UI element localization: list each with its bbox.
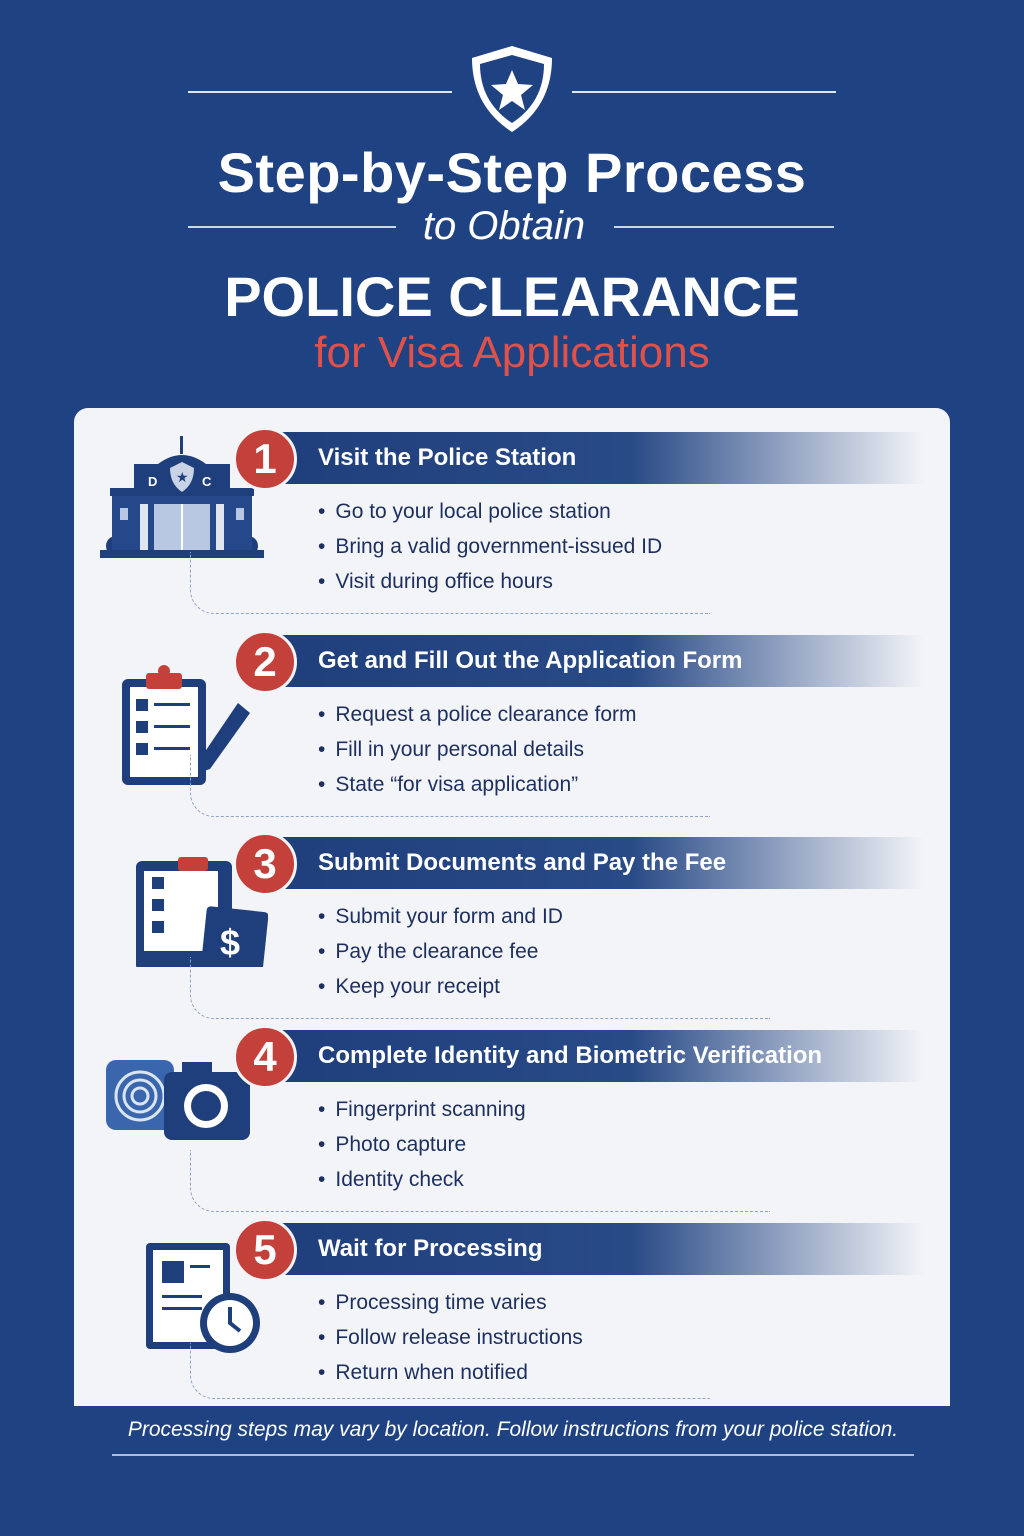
step 4: Complete Identity and Biometric Verification xyxy=(318,1042,822,1069)
bullets: Return when notified xyxy=(335,1361,528,1384)
icon: documents and fee: $ xyxy=(220,922,240,963)
bullets: State “for visa application” xyxy=(335,773,578,796)
bullets: Identity check xyxy=(335,1168,464,1191)
panel: steps card xyxy=(74,408,950,1406)
icon: clipboard xyxy=(122,665,250,785)
step 4: 4 xyxy=(253,1033,277,1080)
icon: documents and fee xyxy=(136,857,268,967)
step 5: Wait for Processing xyxy=(318,1235,542,1262)
bullets: Go to your local police station xyxy=(335,500,611,523)
icon: fingerprint and camera xyxy=(106,1060,250,1140)
step 1: Visit the Police Station xyxy=(318,444,576,471)
icon: shield star xyxy=(472,46,552,132)
red subtitle: for Visa Applications xyxy=(314,328,710,377)
bullets xyxy=(318,1098,526,1191)
step 2 xyxy=(122,633,912,817)
bullets: Visit during office hours xyxy=(335,570,553,593)
bullets: Processing time varies xyxy=(335,1291,547,1314)
step 2: Get and Fill Out the Application Form xyxy=(318,647,742,674)
bullets: Submit your form and ID xyxy=(335,905,563,928)
main title: POLICE CLEARANCE xyxy=(224,265,800,328)
step 3 xyxy=(136,835,912,1019)
step 1 xyxy=(100,430,912,614)
step 2: 2 xyxy=(253,638,277,685)
footer note: Processing steps may vary by location. Follow instructions from your police station. xyxy=(128,1418,898,1441)
footer note xyxy=(112,1418,914,1456)
bullets xyxy=(318,500,662,593)
icon: police station: D xyxy=(148,474,157,489)
bullets: Request a police clearance form xyxy=(335,703,637,726)
title: Step-by-Step Process xyxy=(218,141,806,204)
subtitle: to Obtain: to Obtain xyxy=(423,204,585,248)
step 1: 1 xyxy=(253,435,277,482)
bullets: Fingerprint scanning xyxy=(335,1098,526,1121)
bullets xyxy=(318,1291,583,1384)
icon: document and clock xyxy=(146,1243,260,1353)
bullets: Follow release instructions xyxy=(335,1326,583,1349)
bullets: Bring a valid government-issued ID xyxy=(335,535,662,558)
bullets xyxy=(318,905,563,998)
bullets: Fill in your personal details xyxy=(335,738,584,761)
bullets xyxy=(318,703,637,796)
header lines and shield xyxy=(188,46,836,132)
icon: police station xyxy=(100,436,264,558)
step 3: 3 xyxy=(253,840,277,887)
bullets: Photo capture xyxy=(335,1133,466,1156)
bullets: Pay the clearance fee xyxy=(335,940,538,963)
step 5: 5 xyxy=(253,1226,277,1273)
step 4 xyxy=(106,1028,912,1212)
step 5 xyxy=(146,1221,912,1399)
step 3: Submit Documents and Pay the Fee xyxy=(318,849,726,876)
icon: police station: C xyxy=(202,474,212,489)
bullets: Keep your receipt xyxy=(335,975,500,998)
icon: police station: ★ xyxy=(176,469,189,485)
